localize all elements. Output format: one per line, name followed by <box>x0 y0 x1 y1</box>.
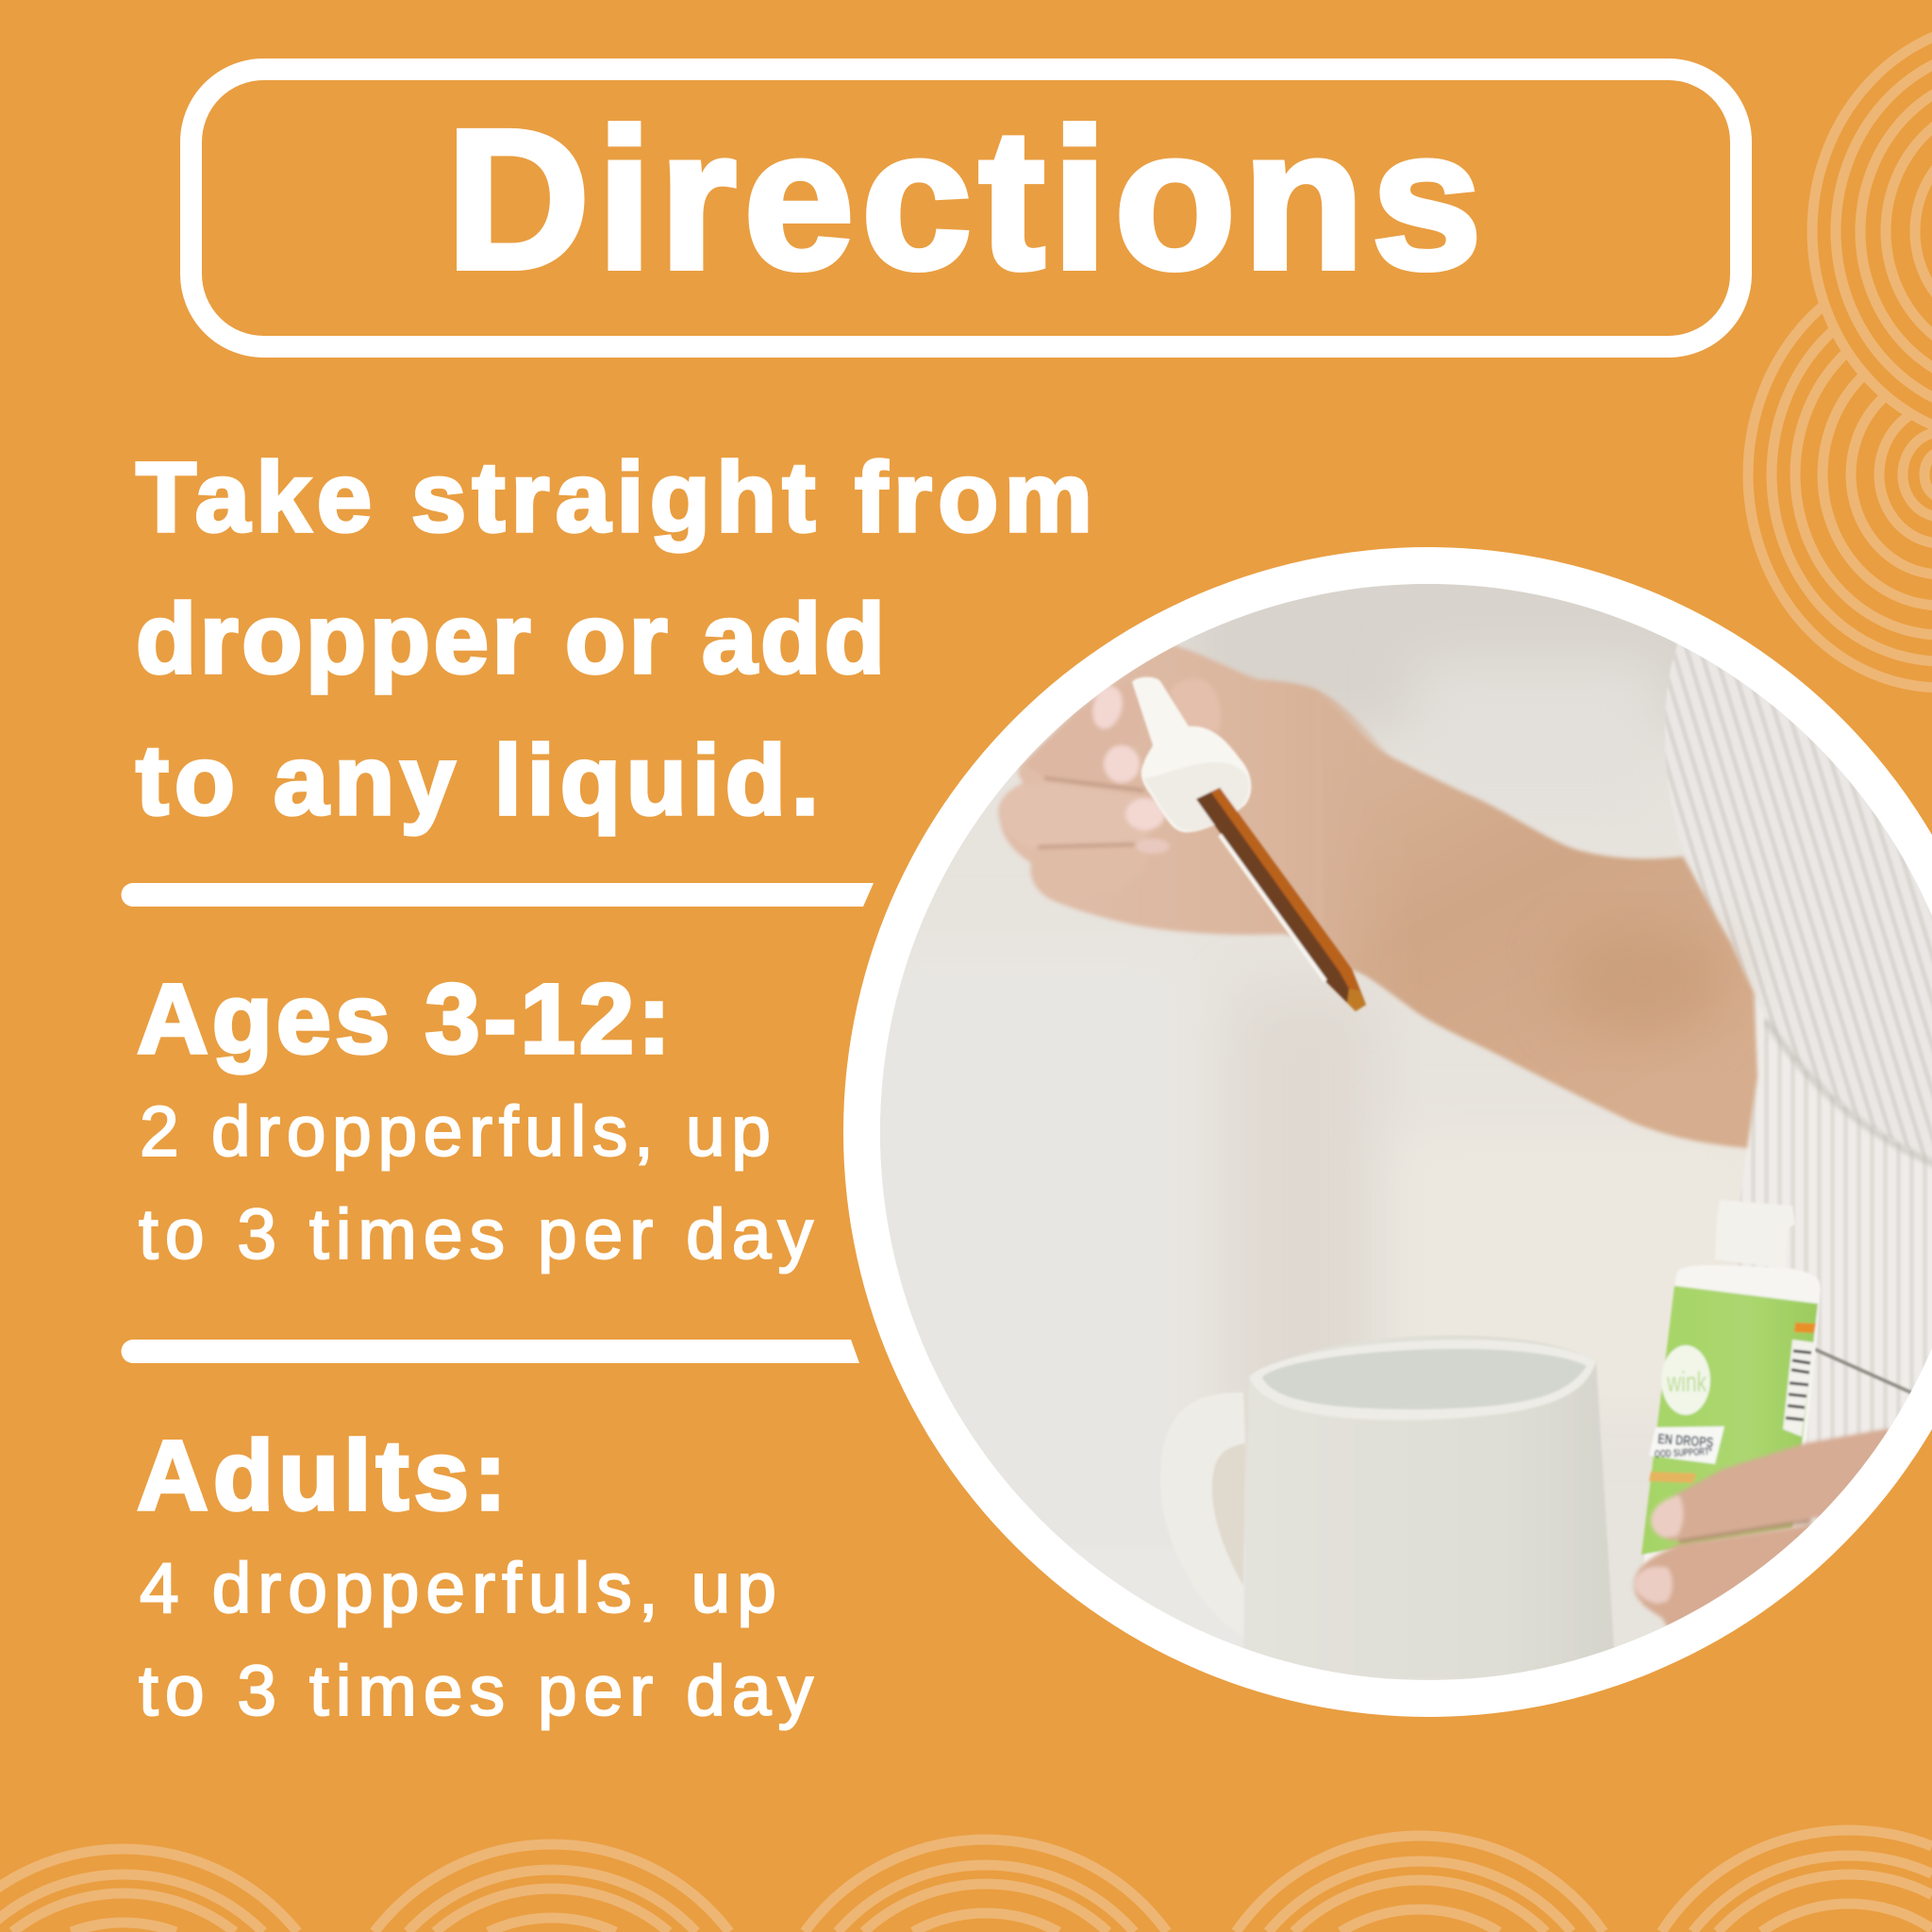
hand <box>996 645 1388 974</box>
shirt strap line <box>1814 1349 1915 1394</box>
adults dosage: Adults: <box>137 1421 507 1531</box>
shirt <box>1665 566 1932 1528</box>
lower hand fingers <box>1632 1426 1890 1626</box>
dropper teat and collar <box>1132 677 1251 832</box>
mug <box>1160 1335 1616 1679</box>
instruction text: Take straight from <box>136 442 1092 553</box>
adults dosage: 4 dropperfuls, up <box>140 1548 776 1627</box>
divider 1 <box>121 883 874 907</box>
brand circle: wink <box>1666 1367 1707 1398</box>
supplement facts panel <box>1783 1340 1814 1437</box>
decorative concentric rings: bottom row <box>0 1830 1932 1932</box>
title: Directions <box>446 88 1482 310</box>
forearm <box>1321 697 1757 1148</box>
product bottle <box>1640 1200 1821 1563</box>
mug body <box>1243 1335 1616 1679</box>
ages 3-12 dosage: Ages 3-12: <box>137 964 671 1074</box>
title panel <box>191 70 1741 347</box>
brand circle <box>1661 1345 1710 1415</box>
green label <box>1641 1286 1818 1555</box>
orange tag <box>1794 1323 1816 1333</box>
photo: circular frame <box>843 547 1932 1717</box>
product name label: OOD SUPPORT* <box>1655 1446 1713 1460</box>
bottle body <box>1643 1265 1821 1563</box>
glass tube with liquid <box>1196 788 1366 1011</box>
instruction text: to any liquid. <box>136 725 819 836</box>
ages 3-12 dosage: 2 dropperfuls, up <box>140 1091 771 1171</box>
mug handle <box>1194 1392 1245 1543</box>
bottle neck <box>1715 1200 1795 1269</box>
ages 3-12 dosage <box>137 964 813 1274</box>
ages 3-12 dosage: to 3 times per day <box>139 1194 813 1274</box>
adults dosage <box>137 1421 813 1730</box>
orange accent bars <box>1649 1472 1696 1483</box>
divider 2 <box>121 1340 859 1363</box>
instruction text: dropper or add <box>136 584 885 694</box>
product name label: EN DROPS <box>1657 1431 1714 1451</box>
dropper <box>1132 677 1366 1011</box>
mug rim and interior <box>1249 1340 1596 1420</box>
adults dosage: to 3 times per day <box>139 1651 813 1730</box>
decorative concentric rings: top right <box>1748 22 1932 688</box>
instruction text <box>136 442 1092 836</box>
wall background <box>880 584 1931 1680</box>
photo: scene <box>880 584 1932 1680</box>
product name label <box>1649 1426 1724 1464</box>
fingernails <box>1089 683 1170 854</box>
